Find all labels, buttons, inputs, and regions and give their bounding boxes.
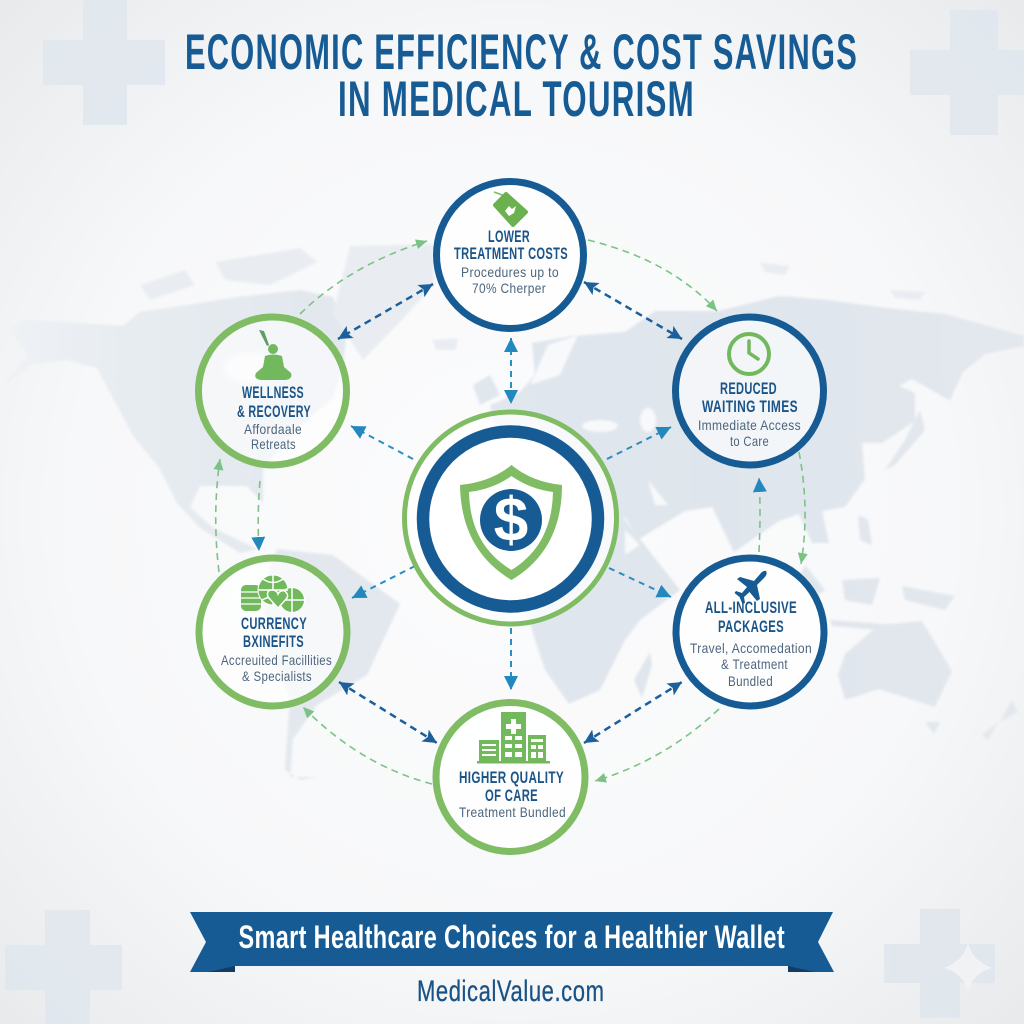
map seas	[530, 335, 668, 555]
node: lower treatment costs: 70% Cherper	[472, 280, 546, 296]
connectors: hub arrows	[351, 338, 671, 690]
icon: clock	[729, 334, 769, 374]
node: all-inclusive packages: Travel, Accomedation	[690, 640, 812, 656]
node: all-inclusive packages: & Treatment	[721, 656, 788, 672]
node: reduced waiting times	[676, 317, 824, 465]
banner ribbon: Smart Healthcare Choices for a Healthier Wallet	[238, 919, 785, 955]
title: IN MEDICAL TOURISM	[338, 71, 695, 127]
node: reduced waiting times: Immediate Access	[698, 417, 801, 433]
map: arctic islands and Greenland	[140, 244, 925, 360]
connectors: dark double arrows	[338, 282, 682, 743]
node: higher quality of care	[436, 702, 585, 852]
node: lower treatment costs	[436, 182, 584, 328]
node: higher quality of care: Treatment Bundled	[459, 804, 566, 820]
world map	[0, 290, 1024, 780]
node: lower treatment costs: LOWER	[488, 228, 530, 246]
node: currency benefits	[199, 558, 347, 706]
node: higher quality of care: HIGHER QUALITY	[459, 769, 564, 787]
icon: meditating person	[255, 330, 291, 380]
node: reduced waiting times: REDUCED	[720, 380, 777, 398]
node: wellness and recovery: & RECOVERY	[237, 403, 311, 421]
map: Hudson Bay highlight	[224, 353, 276, 383]
website: MedicalValue.com	[417, 975, 604, 1008]
icon: price tag	[494, 192, 526, 225]
icon: coins and globes	[241, 575, 304, 612]
title	[185, 24, 858, 127]
node: currency benefits: Accreuited Facillities	[221, 652, 332, 668]
icon: shield with dollar: $	[494, 486, 528, 555]
node: higher quality of care: OF CARE	[485, 787, 538, 805]
node: wellness and recovery: WELLNESS	[242, 384, 304, 402]
node: wellness and recovery: Affordaale	[244, 421, 302, 437]
node: reduced waiting times: to Care	[730, 433, 769, 449]
node: currency benefits: BXINEFITS	[243, 633, 304, 651]
icon: shield with dollar	[460, 465, 562, 580]
node: wellness and recovery	[198, 317, 346, 465]
node: wellness and recovery: Retreats	[251, 436, 296, 452]
node: all-inclusive packages: PACKAGES	[718, 618, 784, 636]
node: reduced waiting times: WAITING TIMES	[702, 398, 798, 416]
node: currency benefits: & Specialists	[242, 668, 312, 684]
node: currency benefits: CURRENCY	[241, 615, 307, 633]
node: all-inclusive packages: ALL-INCLUSIVE	[705, 599, 797, 617]
banner ribbon	[190, 912, 834, 972]
icon: hospital	[477, 712, 550, 764]
icon: airplane	[734, 571, 767, 604]
node: all-inclusive packages: Bundled	[728, 673, 773, 689]
node: lower treatment costs: TREATMENT COSTS	[454, 245, 568, 263]
node: all-inclusive packages	[676, 558, 824, 706]
connectors: outer green arrows	[216, 240, 805, 784]
node: lower treatment costs: Procedures up to	[461, 264, 559, 280]
central hub	[404, 412, 616, 624]
